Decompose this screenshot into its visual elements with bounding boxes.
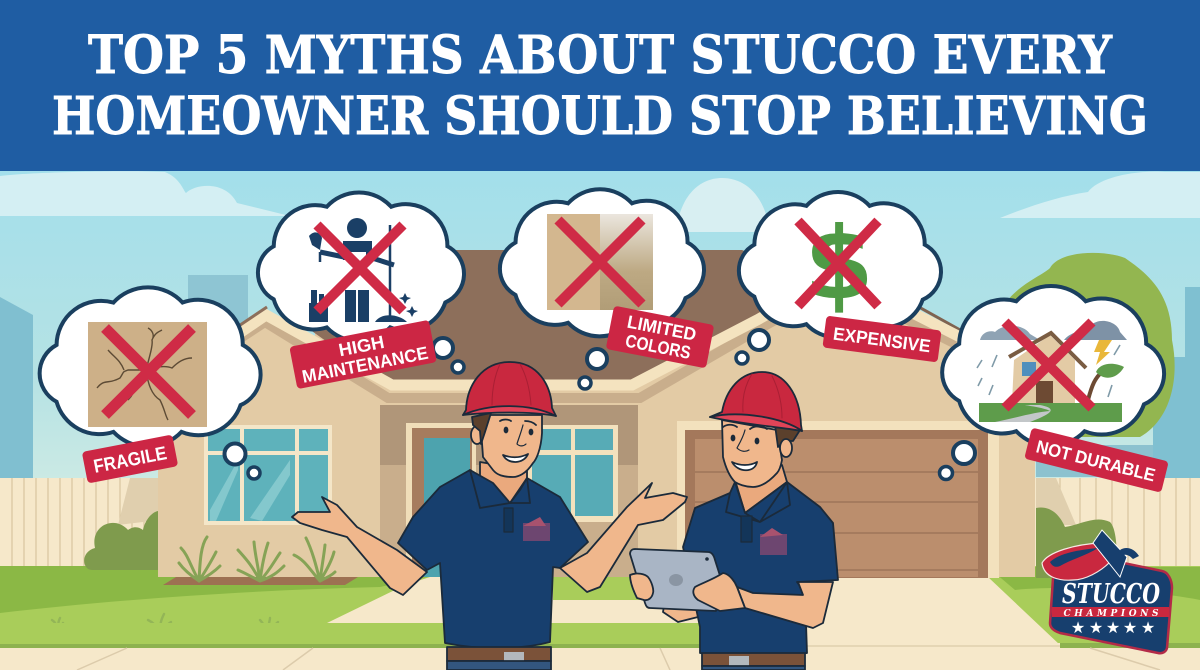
label: high maintenance [289,320,437,389]
label: expensive [822,316,942,362]
thought bubble: expensive [736,192,942,364]
label: not durable: NOT DURABLE [1034,437,1157,485]
label: limited colors: LIMITED [625,312,698,345]
header band [0,0,1200,171]
icon: dollar sign with X: $ [804,205,874,322]
hands [693,573,745,611]
lawn [0,566,1200,648]
label: limited colors [606,306,714,368]
shirt logo [523,517,550,541]
head [480,415,542,477]
title [52,25,1148,147]
belt and trousers [447,647,551,661]
logo: Stucco Champions: CHAMPIONS [1064,609,1159,619]
label: high maintenance: MAINTENANCE [300,343,430,387]
logo: Stucco Champions [1042,530,1172,653]
fences [0,478,1200,570]
bushes [84,511,158,570]
label: fragile [82,435,178,483]
thought bubble: fragile [40,287,261,483]
shirt [398,470,588,648]
head [722,420,782,487]
neck [480,462,527,503]
icon: trowel [1093,530,1139,577]
shirt logo [760,528,787,555]
flower bed [163,577,358,585]
shirt [683,482,838,657]
forearm under tablet [663,600,700,622]
label: expensive: EXPENSIVE [832,324,932,356]
label: limited colors: COLORS [624,331,692,363]
logo: Stucco Champions: STUCCO [1062,579,1160,610]
hard hat [710,372,802,431]
tablet [630,549,722,611]
scenery background [0,170,1200,670]
character: worker with open arms [292,362,687,670]
icon: cracked wall with X [88,322,207,427]
arms and hands [292,497,427,595]
title: TOP 5 MYTHS ABOUT STUCCO EVERY [88,25,1113,86]
arm [737,582,833,628]
logo: Stucco Champions: ★★★★★ [1071,618,1155,637]
icon: storm-damaged house with X [977,321,1127,422]
icon: cleaning person with X [309,218,418,322]
left window [204,425,332,525]
label: high maintenance: HIGH [337,332,386,360]
plants [179,537,335,581]
collar [726,482,790,522]
paths and driveway [0,577,1200,670]
house [158,250,1035,585]
hard hat [463,362,556,416]
thought bubble: not durable [940,286,1169,493]
neck [735,465,787,513]
collar [470,470,530,508]
icon: colour swatch with X [547,214,653,310]
label: fragile: FRAGILE [92,443,169,478]
garage door [677,421,999,578]
swoosh [1042,543,1110,580]
character: worker with tablet [630,372,838,670]
thought bubble: limited colors [500,189,714,389]
thought bubble: high maintenance [258,193,464,389]
belt and trousers [702,653,805,666]
